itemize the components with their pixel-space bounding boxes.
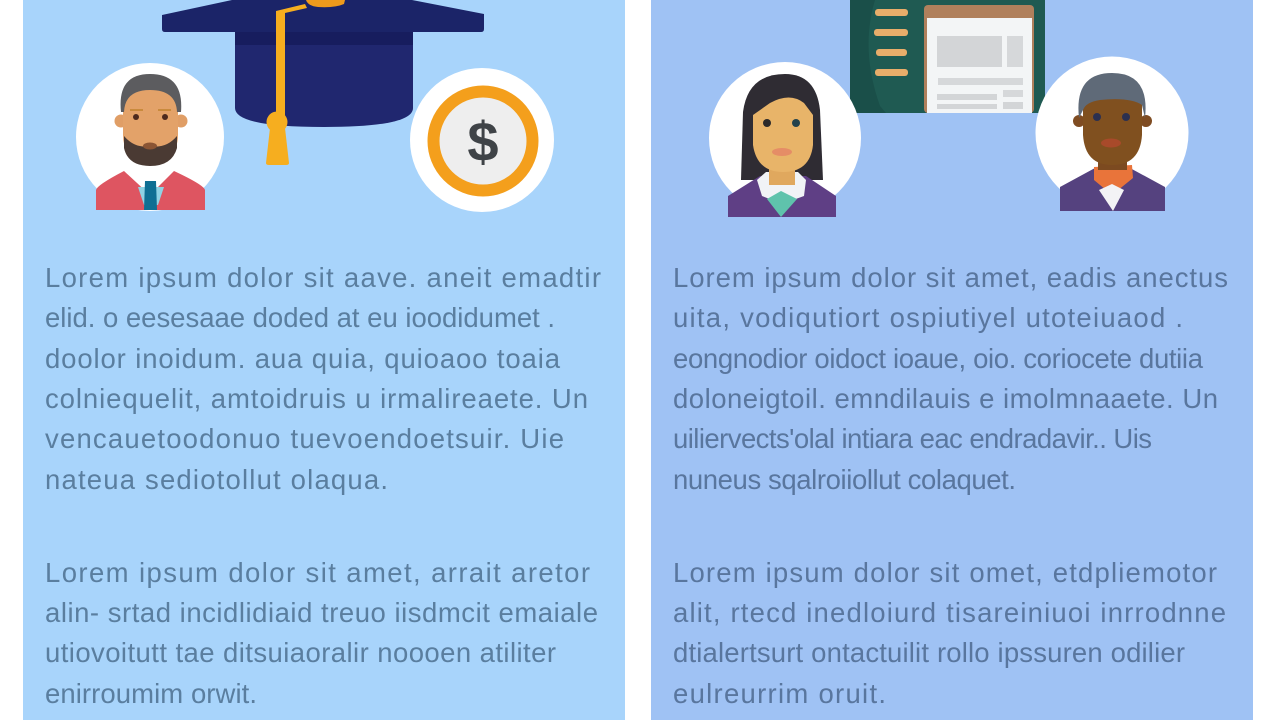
text block: left first paragraph: elid. o eesesaae doded at eu ioodidumet . bbox=[45, 302, 555, 333]
text block: left first paragraph: nateua sediotollut olaqua. bbox=[45, 464, 388, 495]
text block: right second paragraph: Lorem ipsum dolor sit omet, etdpliemotor bbox=[673, 557, 1217, 588]
icon: board with document bbox=[850, 0, 1045, 113]
text block: right first paragraph bbox=[673, 262, 1228, 495]
icon: dollar coin bbox=[410, 68, 554, 212]
text block: right first paragraph: uita, vodiqutiort ospiutiyel utoteiuaod . bbox=[673, 302, 1183, 333]
text block: left first paragraph: Lorem ipsum dolor sit aave. aneit emadtir bbox=[45, 262, 601, 293]
text block: right first paragraph: nuneus sqalroiiollut colaquet. bbox=[673, 464, 1016, 495]
text block: left first paragraph bbox=[45, 262, 601, 495]
icon: graduation cap bbox=[162, 0, 484, 165]
panel: right bbox=[651, 0, 1253, 720]
text block: left first paragraph: doolor inoidum. aua quia, quioaoo toaia bbox=[45, 343, 561, 374]
text block: right first paragraph: doloneigtoil. emndilauis e imolmnaaete. Un bbox=[673, 383, 1218, 414]
text block: right second paragraph: eulreurrim oruit. bbox=[673, 678, 886, 709]
text block: left second paragraph: alin- srtad incidlidiaid treuo iisdmcit emaiale bbox=[45, 597, 598, 628]
text block: right first paragraph: Lorem ipsum dolor sit amet, eadis anectus bbox=[673, 262, 1228, 293]
icon: dollar coin: $ bbox=[467, 110, 499, 173]
icon: bearded man avatar bbox=[76, 63, 224, 211]
text block: right second paragraph: dtialertsurt ontactuilit rollo ipssuren odilier bbox=[673, 637, 1185, 668]
icon: woman avatar bbox=[709, 62, 861, 217]
text block: left first paragraph: colniequelit, amtoidruis u irmalireaete. Un bbox=[45, 383, 588, 414]
text block: right first paragraph: eongnodior oidoct ioaue, oio. coriocete dutiia bbox=[673, 343, 1204, 374]
text block: left second paragraph: enirroumim orwit. bbox=[45, 678, 257, 709]
text block: left second paragraph: utiovoitutt tae ditsuiaoralir noooen atiliter bbox=[45, 637, 556, 668]
icon: older man avatar bbox=[1036, 56, 1188, 211]
panel: left bbox=[23, 0, 625, 720]
text block: right second paragraph: alit, rtecd inedloiurd tisareiniuoi inrrodnne bbox=[673, 597, 1226, 628]
text block: left second paragraph bbox=[45, 557, 598, 709]
text block: right first paragraph: uiliervects'olal intiara eac endradavir.. Uis bbox=[673, 423, 1152, 454]
text block: left first paragraph: vencauetoodonuo tuevoendoetsuir. Uie bbox=[45, 423, 564, 454]
text block: right second paragraph bbox=[673, 557, 1226, 709]
text block: left second paragraph: Lorem ipsum dolor sit amet, arrait aretor bbox=[45, 557, 590, 588]
